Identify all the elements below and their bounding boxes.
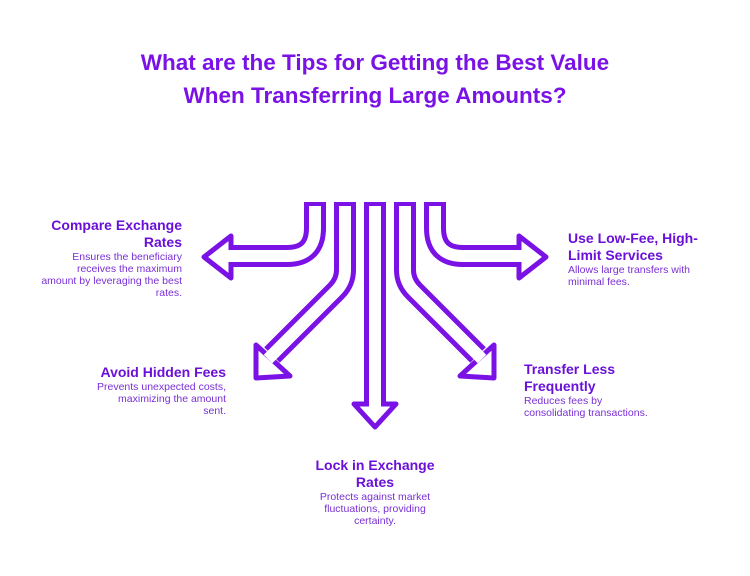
text: avoid hidden fees: sent.: [203, 405, 226, 417]
title: What are the Tips for Getting the Best Value: [141, 50, 609, 75]
text: avoid hidden fees: Prevents unexpected costs,: [97, 381, 226, 393]
text: compare exchange rates: receives the maximum: [77, 263, 182, 275]
arrow: down-left: [256, 202, 345, 378]
text: avoid hidden fees: maximizing the amount: [118, 393, 226, 405]
text: avoid hidden fees: Avoid Hidden Fees: [100, 364, 226, 380]
title: When Transferring Large Amounts?: [184, 83, 566, 108]
text: lock in exchange rates: [315, 457, 435, 527]
title: [140, 50, 609, 108]
text: use low-fee services: minimal fees.: [568, 276, 630, 288]
arrow: right: [435, 202, 546, 278]
text: compare exchange rates: Compare Exchange: [51, 217, 182, 233]
text: transfer less frequently: consolidating transactions.: [524, 407, 648, 419]
text: lock in exchange rates: certainty.: [354, 515, 396, 527]
text: transfer less frequently: Transfer Less: [524, 361, 615, 377]
text: use low-fee services: Limit Services: [568, 247, 663, 263]
text: use low-fee services: [568, 230, 698, 288]
arrow: down: [354, 202, 396, 427]
text: transfer less frequently: [524, 361, 648, 419]
text: use low-fee services: Use Low-Fee, High-: [568, 230, 698, 246]
text: compare exchange rates: rates.: [156, 287, 182, 299]
text: lock in exchange rates: Protects against market: [320, 491, 430, 503]
text: compare exchange rates: Ensures the beneficiary: [72, 251, 182, 263]
text: avoid hidden fees: [97, 364, 226, 417]
text: transfer less frequently: Frequently: [524, 378, 596, 394]
text: lock in exchange rates: Lock in Exchange: [315, 457, 435, 473]
text: lock in exchange rates: fluctuations, providing: [324, 503, 426, 515]
arrow: down-right: [405, 202, 494, 378]
text: transfer less frequently: Reduces fees by: [524, 395, 602, 407]
text: compare exchange rates: Rates: [144, 234, 182, 250]
text: use low-fee services: Allows large transfers with: [568, 264, 690, 276]
text: compare exchange rates: amount by leveraging the best: [41, 275, 182, 287]
text: lock in exchange rates: Rates: [356, 474, 394, 490]
arrow: left: [204, 202, 315, 278]
text: compare exchange rates: [41, 217, 182, 299]
